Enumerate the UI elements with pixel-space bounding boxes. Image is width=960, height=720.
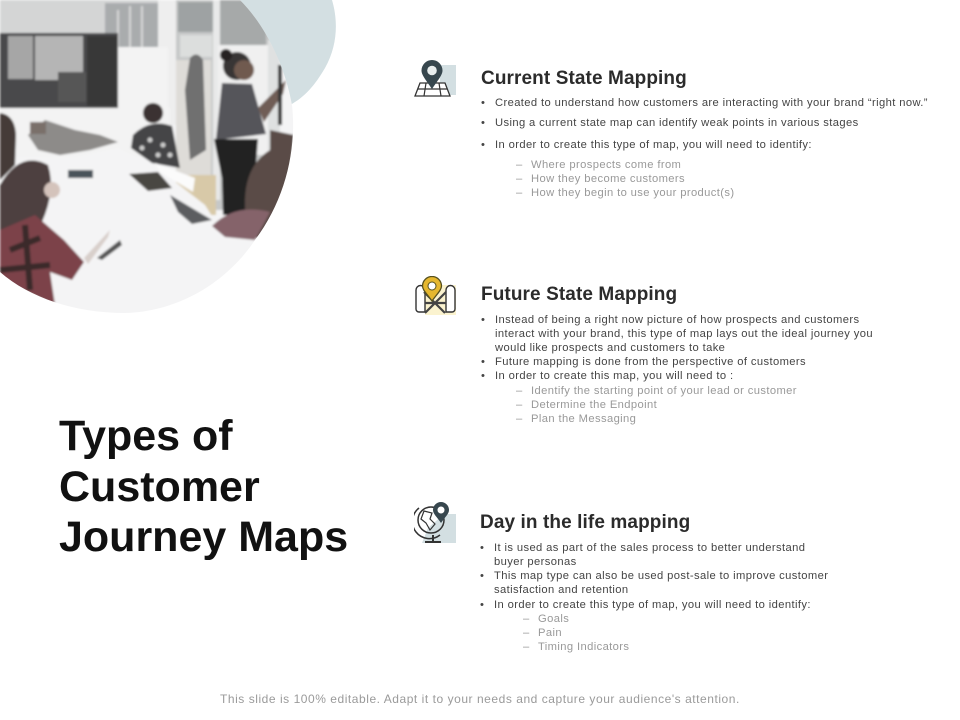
presenter	[214, 49, 286, 215]
sub-bullets: –	[516, 187, 523, 199]
blue accent shape	[240, 0, 336, 105]
title: Customer	[59, 462, 260, 510]
bullet 2: •	[481, 117, 485, 129]
text: day in the life details: satisfaction and retention	[494, 584, 629, 596]
text: future state details: interact with your brand, this type of map lays out the ideal journey you	[495, 328, 873, 340]
sub-bullets: How they begin to use your product(s)	[531, 187, 734, 199]
seated woman centre	[131, 103, 180, 168]
sub-bullets: Goals	[538, 613, 569, 625]
woman left with plaid shirt	[0, 160, 122, 305]
sub-bullets	[516, 385, 797, 425]
bullet 2: Future mapping is done from the perspective of customers	[495, 356, 806, 368]
bullet 1: It is used as part of the sales process to better understand	[494, 542, 805, 554]
sub-bullets: –	[523, 613, 530, 625]
table items	[28, 120, 118, 155]
bullet 1: •	[481, 314, 485, 326]
bullet 1: Created to understand how customers are interacting with your brand “right now.”	[495, 97, 928, 109]
bullet 1: •	[481, 97, 485, 109]
sub-bullets: –	[516, 399, 523, 411]
text: future state details	[481, 314, 873, 425]
bullet 2	[480, 570, 828, 596]
heading: current state: Current State Mapping	[481, 68, 687, 89]
glass reflection person	[185, 54, 206, 160]
photo: team meeting in decorative blob	[0, 0, 336, 313]
sub-bullets: Timing Indicators	[538, 641, 629, 653]
icon: globe with pin	[414, 502, 456, 543]
sub-bullets: How they become customers	[531, 173, 685, 185]
sub-bullets: Identify the starting point of your lead or customer	[531, 385, 797, 397]
table	[174, 182, 212, 216]
sub-bullets: Where prospects come from	[531, 159, 681, 171]
bullet 3: In order to create this type of map, you will need to identify:	[494, 599, 811, 611]
title: Journey Maps	[59, 513, 348, 561]
sub-bullets: –	[516, 413, 523, 425]
woman far left	[0, 113, 16, 180]
text: future state details: would like prospects and customers to take	[495, 342, 725, 354]
seated woman right	[245, 130, 294, 240]
bullet 1: Instead of being a right now picture of how prospects and customers	[495, 314, 859, 326]
sub-bullets	[516, 159, 734, 199]
bullet 2: Using a current state map can identify weak points in various stages	[495, 117, 859, 129]
text: day in the life details: buyer personas	[494, 556, 577, 568]
footer note: This slide is 100% editable. Adapt it to your needs and capture your audience's attention.	[220, 692, 740, 706]
heading: future state: Future State Mapping	[481, 284, 677, 305]
bullet 2: This map type can also be used post-sale to improve customer	[494, 570, 828, 582]
chair and laptop	[155, 163, 195, 192]
bullet 1: •	[480, 542, 484, 554]
bullet 1	[481, 314, 873, 354]
sub-bullets: –	[516, 385, 523, 397]
wall monitor	[0, 33, 118, 108]
bullet 3: •	[481, 139, 485, 151]
bullet 2: •	[481, 356, 485, 368]
title: Types of	[59, 412, 233, 460]
bullet 3: •	[481, 370, 485, 382]
text: day in the life details	[480, 542, 828, 653]
sub-bullets: Determine the Endpoint	[531, 399, 657, 411]
title	[59, 412, 348, 561]
sub-bullets: –	[516, 173, 523, 185]
bullet 2: •	[480, 570, 484, 582]
icon: map pin on map	[414, 60, 456, 97]
icon: treasure map with pin	[415, 276, 456, 315]
sub-bullets: Pain	[538, 627, 562, 639]
sub-bullets: –	[523, 641, 530, 653]
text: current state details	[481, 97, 928, 199]
sub-bullets	[523, 613, 629, 653]
bullet 1	[480, 542, 805, 568]
bullet 3: In order to create this type of map, you will need to identify:	[495, 139, 812, 151]
bullet 3: •	[480, 599, 484, 611]
sub-bullets: Plan the Messaging	[531, 413, 636, 425]
heading: day in the life: Day in the life mapping	[480, 512, 690, 533]
sub-bullets: –	[516, 159, 523, 171]
bullet 3: In order to create this map, you will need to :	[495, 370, 733, 382]
sub-bullets: –	[523, 627, 530, 639]
